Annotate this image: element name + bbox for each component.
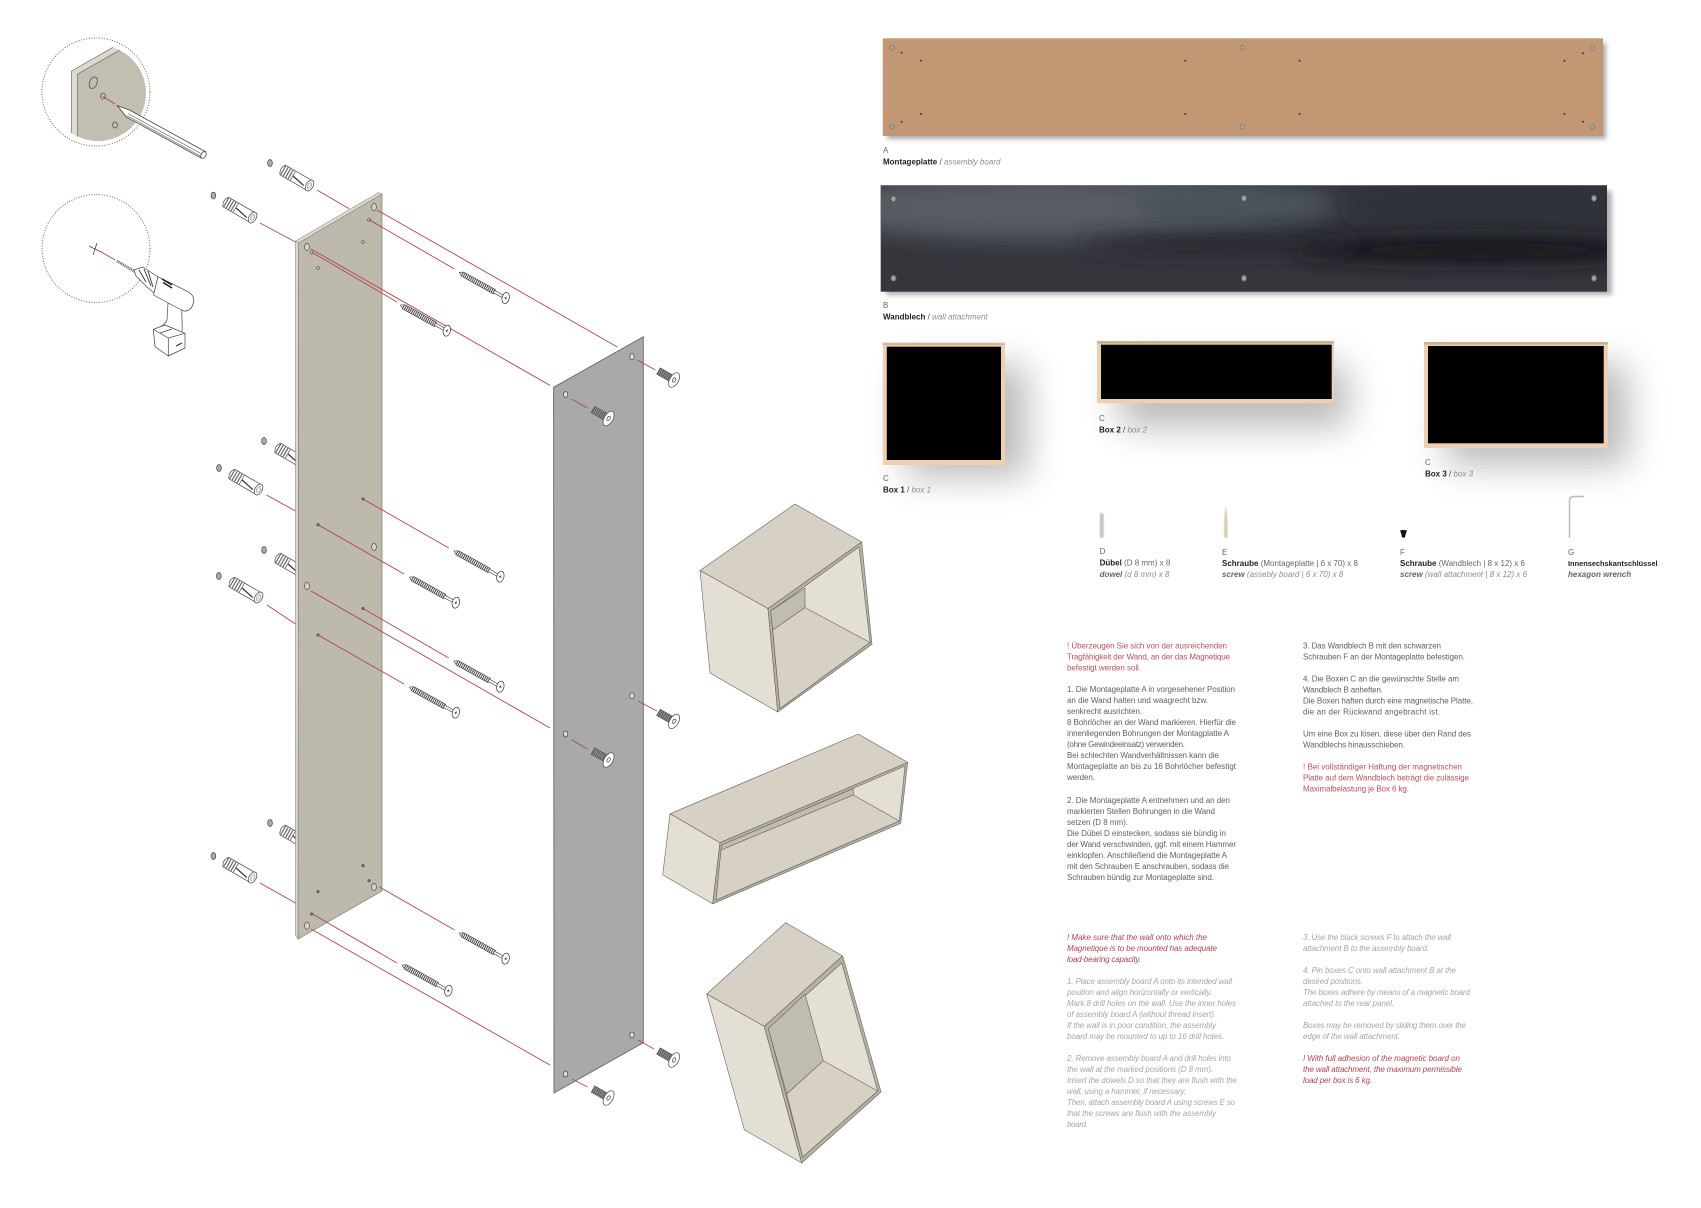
label: wrench: G (1568, 548, 1574, 557)
label: box 1: box 1 (911, 486, 931, 494)
text block: English instructions, column 2: the wall attachment, the maximum permissible (1303, 1065, 1463, 1074)
text block: German instructions, column 1: innenliegenden Bohrungen der Montagplatte A (1067, 729, 1230, 738)
label: assembly board: A (883, 146, 888, 155)
photo: dowel D (1100, 513, 1104, 538)
text block: German instructions, column 1: Schrauben bündig zur Montageplatte sind. (1067, 873, 1214, 882)
text block: English instructions, column 1: If the wall is in poor condition, the assembly (1067, 1021, 1217, 1030)
text block: German instructions, column 1: Tragfähigkeit der Wand, an der das Magnetique (1067, 653, 1231, 662)
text block: German instructions, column 1: setzen (D 8 mm). (1067, 818, 1128, 827)
label: dowel: dowel (d 8 mm) x 8 (1100, 570, 1169, 579)
text block: English instructions, column 1: Mark 8 drill holes on the wall. Use the inner holes (1067, 999, 1236, 1008)
box 3 isometric (707, 923, 881, 1163)
label: box 3: box 3 (1453, 470, 1474, 478)
wood screws E (397, 267, 513, 999)
text block: English instructions, column 1: of assembly board A (without thread insert). (1067, 1010, 1216, 1019)
text block: English instructions, column 2: load per box is 6 kg. (1303, 1076, 1372, 1085)
photo: box 3 (1424, 342, 1628, 465)
text block: German instructions, column 2: 4. Die Boxen C an die gewünschte Stelle am (1303, 675, 1459, 684)
label: box 3: Box 3 / (1425, 470, 1451, 478)
text block: English instructions, column 2: desired positions. (1303, 977, 1363, 986)
text block: German instructions, column 1: (ohne Gewindeeinsatz) verwenden. (1067, 740, 1185, 749)
label: wall screw: screw (wall attachment | 8 x 12) x 6 (1400, 570, 1527, 579)
label: wall screw: Schraube (Wandblech | 8 x 12) x 6 (1400, 559, 1525, 568)
photo: hexagon wrench G (1570, 496, 1584, 538)
dowels behind the assembly board (211, 160, 349, 903)
label: box 3: C (1425, 458, 1431, 467)
label: assembly screw: Schraube (Montageplatte | 6 x 70) x 8 (1222, 559, 1358, 568)
text block: English instructions, column 1: ! Make sure that the wall onto which the (1067, 933, 1208, 942)
photo: screw F (1400, 530, 1407, 538)
box 1 isometric (700, 504, 872, 712)
icon: cordless drill (117, 261, 194, 356)
photo: box 1 (883, 343, 1027, 477)
text block: English instructions, column 2: attached to the rear panel. (1303, 999, 1394, 1008)
label: assembly board: Montageplatte / (883, 158, 942, 166)
text block: German instructions, column 2: Um eine Box zu lösen, diese über den Rand des (1303, 730, 1471, 739)
inset: drilling at the marked position (42, 194, 194, 356)
text block: English instructions, column 1: wall, using a hammer, if necessary. (1067, 1087, 1186, 1096)
black screws F (589, 364, 682, 1107)
text block: English instructions, column 1: Then, attach assembly board A using screws E so (1067, 1098, 1236, 1107)
box 2 isometric (663, 734, 908, 904)
text block: German instructions, column 2: die an der Rückwand angebracht ist. (1303, 708, 1440, 717)
text block: German instructions, column 1: der Wand verschwinden, ggf. mit einem Hammer (1067, 840, 1236, 849)
text block: German instructions, column 2 (1303, 642, 1473, 794)
text block: English instructions, column 1: Insert the dowels D so that they are flush with the (1067, 1076, 1238, 1085)
text block: German instructions, column 2: Wandblechs hinausschieben. (1303, 741, 1405, 750)
text block: English instructions, column 1: board may be mounted to up to 16 drill holes. (1067, 1032, 1224, 1041)
photo: assembly board A (883, 38, 1606, 139)
text block: English instructions, column 1: 1. Place assembly board A onto its intended wall (1067, 977, 1232, 986)
label: box 2: box 2 (1127, 426, 1148, 434)
text block: German instructions, column 2: Schrauben F an der Montageplatte befestigen. (1303, 653, 1465, 662)
text block: English instructions, column 1: that the screws are flush with the assembly (1067, 1109, 1217, 1118)
label: wall attachment: wall attachment (932, 312, 988, 322)
text block: English instructions, column 2: edge of the wall attachment. (1303, 1032, 1400, 1041)
label: box 2: Box 2 / (1099, 426, 1125, 434)
text block: German instructions, column 1: an die Wand halten und waagrecht bzw. (1067, 696, 1208, 705)
text block: German instructions, column 1: Bei schlechten Wandverhältnissen kann die (1067, 751, 1220, 760)
label: wrench: hexagon wrench (1568, 570, 1631, 579)
text block: English instructions, column 2 (1303, 933, 1471, 1085)
label: box 1: Box 1 / (883, 486, 909, 494)
assembly board A, isometric (296, 192, 382, 939)
text block: English instructions, column 1: position and align horizontally or vertically. (1066, 988, 1212, 997)
photo: wall attachment B (880, 185, 1614, 298)
inset: marking a drill hole with pencil (42, 38, 207, 160)
text block: English instructions, column 2: 3. Use the black screws F to attach the wall (1303, 933, 1451, 942)
label: assembly board: assembly board (944, 158, 1001, 166)
text block: German instructions, column 1: einklopfen. Anschließend die Montageplatte A (1067, 851, 1228, 860)
text block: English instructions, column 1: the wall at the marked positions (D 8 mm). (1067, 1065, 1213, 1074)
label: box 1: C (883, 474, 889, 483)
text block: English instructions, column 1: Magnetique is to be mounted has adequate (1067, 944, 1218, 953)
text block: English instructions, column 2: 4. Pin boxes C onto wall attachment B at the (1303, 966, 1457, 975)
label: wrench: Innensechskantschlüssel (1568, 559, 1658, 568)
text block: German instructions, column 1: 1. Die Montageplatte A in vorgesehener Position (1067, 685, 1235, 694)
text block: German instructions, column 1: befestigt werden soll. (1067, 664, 1141, 673)
text block: English instructions, column 1: 2. Remove assembly board A and drill holes into (1066, 1054, 1232, 1063)
text block: German instructions, column 1: werden. (1066, 773, 1095, 782)
text block: German instructions, column 2: Wandblech B anheften. (1303, 686, 1383, 695)
text block: German instructions, column 1: Die Dübel D einstecken, sodass sie bündig in (1067, 829, 1226, 838)
label: box 2: C (1099, 414, 1105, 423)
text block: English instructions, column 2: attachment B to the assembly board. (1303, 944, 1429, 953)
label: wall screw: F (1400, 548, 1405, 557)
label: dowel: Dübel (D 8 mm) x 8 (1100, 558, 1170, 568)
text block: German instructions, column 2: Maximalbelastung je Box 6 kg. (1303, 785, 1409, 794)
label: wall attachment: B (883, 301, 888, 310)
icon: pencil (117, 106, 207, 159)
text block: German instructions, column 1: ! Überzeugen Sie sich von der ausreichenden (1067, 642, 1227, 651)
label: assembly screw: screw (assebly board | 6 x 70) x 8 (1222, 570, 1343, 579)
text block: German instructions, column 1: senkrecht ausrichten. (1067, 707, 1142, 716)
label: dowel: D (1100, 547, 1105, 556)
photo: screw E (1224, 504, 1228, 538)
wall attachment B, isometric (554, 337, 643, 1093)
text block: English instructions, column 1: load-bearing capacity. (1067, 955, 1141, 964)
text block: German instructions, column 1: markierten Stellen Bohrungen in die Wand (1067, 807, 1215, 816)
text block: German instructions, column 1: mit den Schrauben E anschrauben, sodass die (1067, 862, 1230, 871)
text block: German instructions, column 1: 8 Bohrlöcher an der Wand markieren. Hierfür die (1067, 718, 1237, 727)
text block: English instructions, column 1: board. (1067, 1120, 1088, 1129)
label: assembly screw: E (1222, 548, 1227, 557)
text block: German instructions, column 2: Die Boxen haften durch eine magnetische Platte, (1303, 697, 1473, 706)
text block: English instructions, column 2: Boxes may be removed by sliding them over the (1303, 1021, 1467, 1030)
photo: box 2 (1097, 341, 1348, 427)
label: wall attachment: Wandblech / (883, 312, 930, 322)
text block: German instructions, column 2: ! Bei vollständiger Haftung der magnetischen (1303, 763, 1462, 772)
text block: German instructions, column 1 (1066, 642, 1237, 882)
text block: German instructions, column 2: Platte auf dem Wandblech beträgt die zulässige (1303, 774, 1470, 783)
text block: English instructions, column 2: The boxes adhere by means of a magnetic board (1303, 988, 1471, 997)
text block: English instructions, column 2: ! With full adhesion of the magnetic board on (1303, 1054, 1461, 1063)
text block: German instructions, column 1: Montageplatte an bis zu 16 Bohrlöcher befestigt (1067, 762, 1237, 771)
text block: German instructions, column 1: 2. Die Montageplatte A entnehmen und an den (1067, 796, 1230, 805)
text block: German instructions, column 2: 3. Das Wandblech B mit den schwarzen (1303, 642, 1441, 651)
red assembly guide lines (311, 210, 657, 1087)
text block: English instructions, column 1 (1066, 933, 1238, 1129)
